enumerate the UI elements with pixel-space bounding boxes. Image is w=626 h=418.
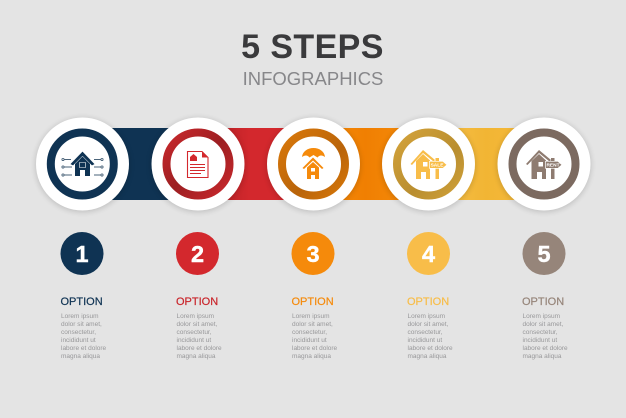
text block: option 2: OPTION	[176, 296, 218, 308]
icon: house for sale: SALE	[431, 163, 444, 169]
icon: house document	[188, 152, 208, 178]
text block: option 3: dolor sit amet,	[292, 321, 333, 328]
text block: option 1: OPTION	[60, 296, 103, 308]
number badge 3: 3	[306, 241, 320, 267]
text block: option 5: dolor sit amet,	[522, 321, 564, 328]
text block: option 5	[522, 296, 568, 360]
number badge 1: 1	[75, 241, 89, 267]
text block: option 3: Lorem ipsum	[292, 313, 330, 320]
text block: option 3: incididunt ut	[292, 337, 327, 344]
text block: option 4: Lorem ipsum	[408, 313, 445, 320]
text block: option 4: dolor sit amet,	[408, 321, 449, 328]
text block: option 2: dolor sit amet,	[176, 321, 218, 328]
number badge 4: 4	[422, 241, 435, 267]
number badge 4	[407, 232, 450, 275]
text block: option 1: Lorem ipsum	[61, 313, 99, 320]
text block: option 5: OPTION	[522, 296, 564, 308]
text block: option 5: consectetur,	[522, 329, 558, 336]
step 2 medallion	[151, 118, 245, 212]
text block: option 1	[60, 296, 107, 360]
step 3 medallion	[266, 118, 360, 212]
number badge 2: 2	[191, 241, 204, 267]
text block: option 3: consectetur,	[292, 329, 327, 336]
text block: option 2: incididunt ut	[176, 337, 211, 344]
text block: option 4: labore et dolore	[408, 345, 453, 352]
subtitle: INFOGRAPHICS	[243, 68, 383, 89]
number badge 5	[522, 232, 566, 275]
text block: option 3: magna aliqua	[292, 353, 331, 360]
text block: option 4: magna aliqua	[408, 353, 447, 360]
icon: house for rent: RENT	[546, 163, 560, 169]
step 1 medallion	[36, 118, 130, 212]
icon: insured house under umbrella	[302, 148, 325, 179]
text block: option 2	[176, 296, 222, 360]
connecting ribbon	[82, 128, 544, 200]
text block: option 1: magna aliqua	[61, 353, 100, 360]
text block: option 3	[292, 296, 338, 360]
text block: option 2: labore et dolore	[176, 345, 222, 352]
title: 5 STEPS	[241, 28, 384, 66]
text block: option 2: consectetur,	[176, 329, 212, 336]
step 5 medallion	[497, 118, 591, 212]
text block: option 4: incididunt ut	[408, 337, 442, 344]
text block: option 5: labore et dolore	[522, 345, 568, 352]
number badge 2	[176, 232, 219, 275]
text block: option 5: Lorem ipsum	[522, 313, 560, 320]
text block: option 3: OPTION	[292, 296, 334, 308]
text block: option 1: consectetur,	[61, 329, 96, 336]
number badge 3	[292, 232, 334, 275]
text block: option 4: OPTION	[407, 296, 449, 308]
text block: option 1: labore et dolore	[61, 345, 107, 352]
text block: option 2: magna aliqua	[176, 353, 216, 360]
text block: option 5: magna aliqua	[522, 353, 562, 360]
text block: option 5: incididunt ut	[522, 337, 557, 344]
number badge 1	[60, 232, 104, 275]
text block: option 4: consectetur,	[408, 329, 443, 336]
text block: option 1: incididunt ut	[61, 337, 96, 344]
text block: option 2: Lorem ipsum	[176, 313, 214, 320]
text block: option 1: dolor sit amet,	[61, 321, 102, 328]
number badge 5: 5	[537, 241, 551, 267]
text block: option 3: labore et dolore	[292, 345, 338, 352]
icon: smart home	[62, 152, 103, 176]
text block: option 4	[407, 296, 453, 360]
step 4 medallion	[382, 118, 476, 212]
